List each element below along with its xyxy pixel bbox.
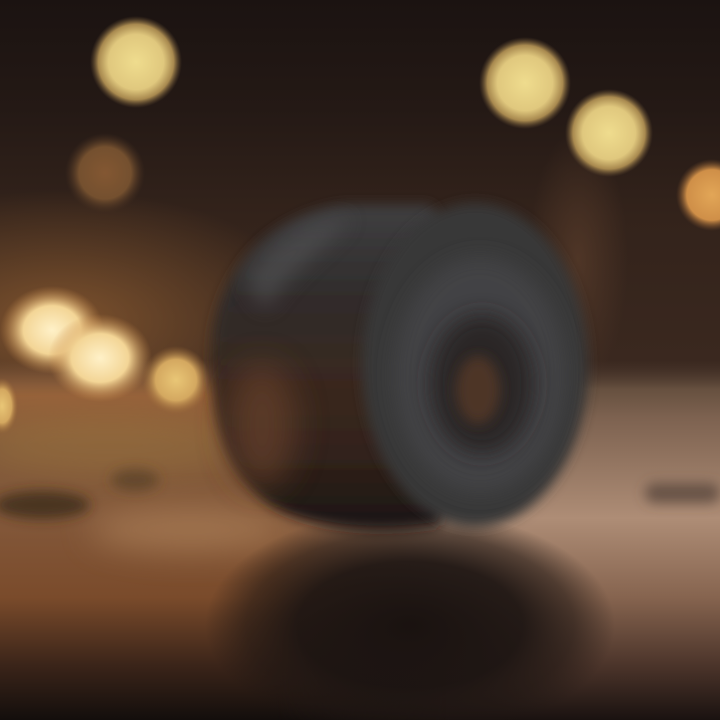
- warm reflection on tire side: [228, 363, 296, 487]
- bokeh: dim orange light: [68, 136, 142, 208]
- tire inner groove: [430, 314, 534, 454]
- bokeh: bright light one: [0, 286, 104, 374]
- bokeh: top right light: [565, 89, 653, 177]
- highlight on tire shoulder: [245, 218, 350, 310]
- bokeh: orange right edge light: [676, 159, 720, 231]
- tire front face: [362, 203, 588, 527]
- bright lights on the left: [0, 286, 210, 434]
- warm glow behind the object: [0, 130, 628, 450]
- bokeh: amber light: [144, 348, 207, 410]
- tire side body: [211, 205, 500, 530]
- tire object: [211, 203, 588, 530]
- shadow under the object: [214, 520, 608, 704]
- bokeh: edge light: [0, 380, 16, 432]
- bokeh: top centre-right light: [479, 37, 571, 129]
- tire tread band: [394, 257, 566, 493]
- table reflections and dark shapes: [0, 469, 720, 519]
- table surface: [0, 360, 720, 720]
- tire hub: [456, 356, 500, 424]
- bokeh: bright light two: [51, 316, 150, 399]
- bokeh lights top: [65, 16, 720, 231]
- bokeh: top left light: [90, 16, 182, 108]
